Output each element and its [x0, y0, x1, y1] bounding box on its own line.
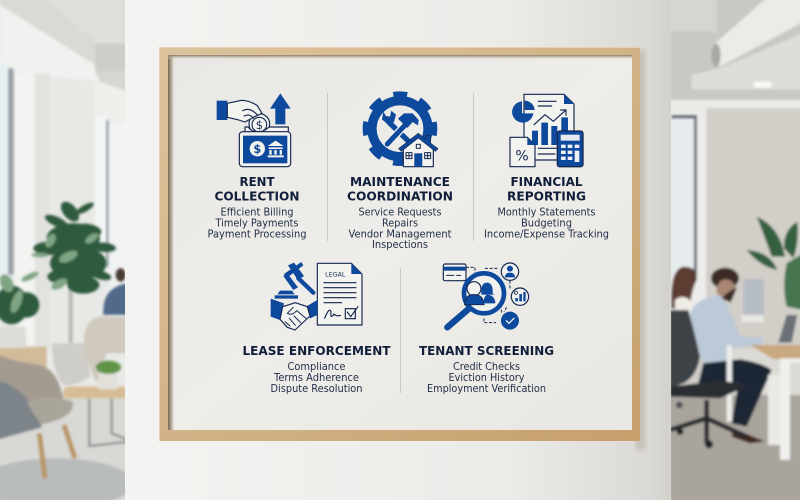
list: Repairs — [382, 218, 418, 230]
list: Efficient Billing — [220, 206, 294, 218]
list: Timely Payments — [215, 218, 298, 230]
list — [348, 206, 452, 251]
list: Payment Processing — [208, 228, 306, 240]
list — [484, 206, 609, 240]
icon: gavel, handshake and legal document: LEGAL — [325, 272, 346, 279]
whiteboard panel — [168, 55, 632, 430]
list: Inspections — [372, 239, 428, 251]
icon: magnifier over tenants with check nodes — [443, 263, 529, 330]
list — [208, 206, 306, 240]
icon: hand depositing coin into safe: $ — [253, 142, 261, 156]
list: Income/Expense Tracking — [484, 228, 609, 240]
heading: TENANT SCREENING — [419, 344, 554, 359]
background: right open office — [670, 0, 800, 500]
icon: report with chart and calculator — [510, 94, 583, 167]
list — [270, 361, 362, 395]
list: Compliance — [288, 361, 346, 373]
heading: LEASE ENFORCEMENT — [242, 344, 391, 359]
list: Budgeting — [521, 218, 572, 230]
panel: financial reporting — [484, 94, 609, 241]
panel: lease enforcement — [242, 262, 391, 395]
list: Vendor Management — [348, 228, 452, 240]
list: Dispute Resolution — [270, 383, 362, 395]
background: left office lounge — [0, 0, 133, 500]
icon: report with chart and calculator: % — [515, 149, 529, 165]
icon: hand depositing coin into safe: $ — [256, 118, 263, 132]
wall panel — [125, 0, 671, 500]
list — [427, 361, 546, 395]
icon: gavel, handshake and legal document — [271, 262, 362, 330]
wooden frame — [159, 47, 640, 441]
heading line 2: COLLECTION — [214, 190, 300, 204]
icon: gear with tools and house — [365, 94, 438, 167]
list: Credit Checks — [453, 361, 520, 373]
panel: rent collection — [208, 93, 306, 240]
icon: hand depositing coin into safe — [217, 93, 291, 167]
panel: tenant screening — [419, 263, 554, 395]
heading: RENT — [240, 175, 275, 190]
background: left potted plants — [0, 198, 116, 324]
heading: MAINTENANCE — [350, 175, 450, 190]
list: Terms Adherence — [273, 372, 359, 384]
list: Eviction History — [448, 372, 524, 384]
list: Employment Verification — [427, 383, 546, 395]
list: Service Requests — [358, 206, 442, 218]
list: Monthly Statements — [498, 206, 596, 218]
panel: maintenance coordination — [347, 94, 453, 251]
background: left seating and table — [0, 268, 130, 478]
heading line 2: COORDINATION — [347, 190, 453, 204]
heading line 2: REPORTING — [507, 190, 586, 204]
heading: FINANCIAL — [510, 175, 582, 190]
frame shadow on wall — [636, 50, 645, 450]
